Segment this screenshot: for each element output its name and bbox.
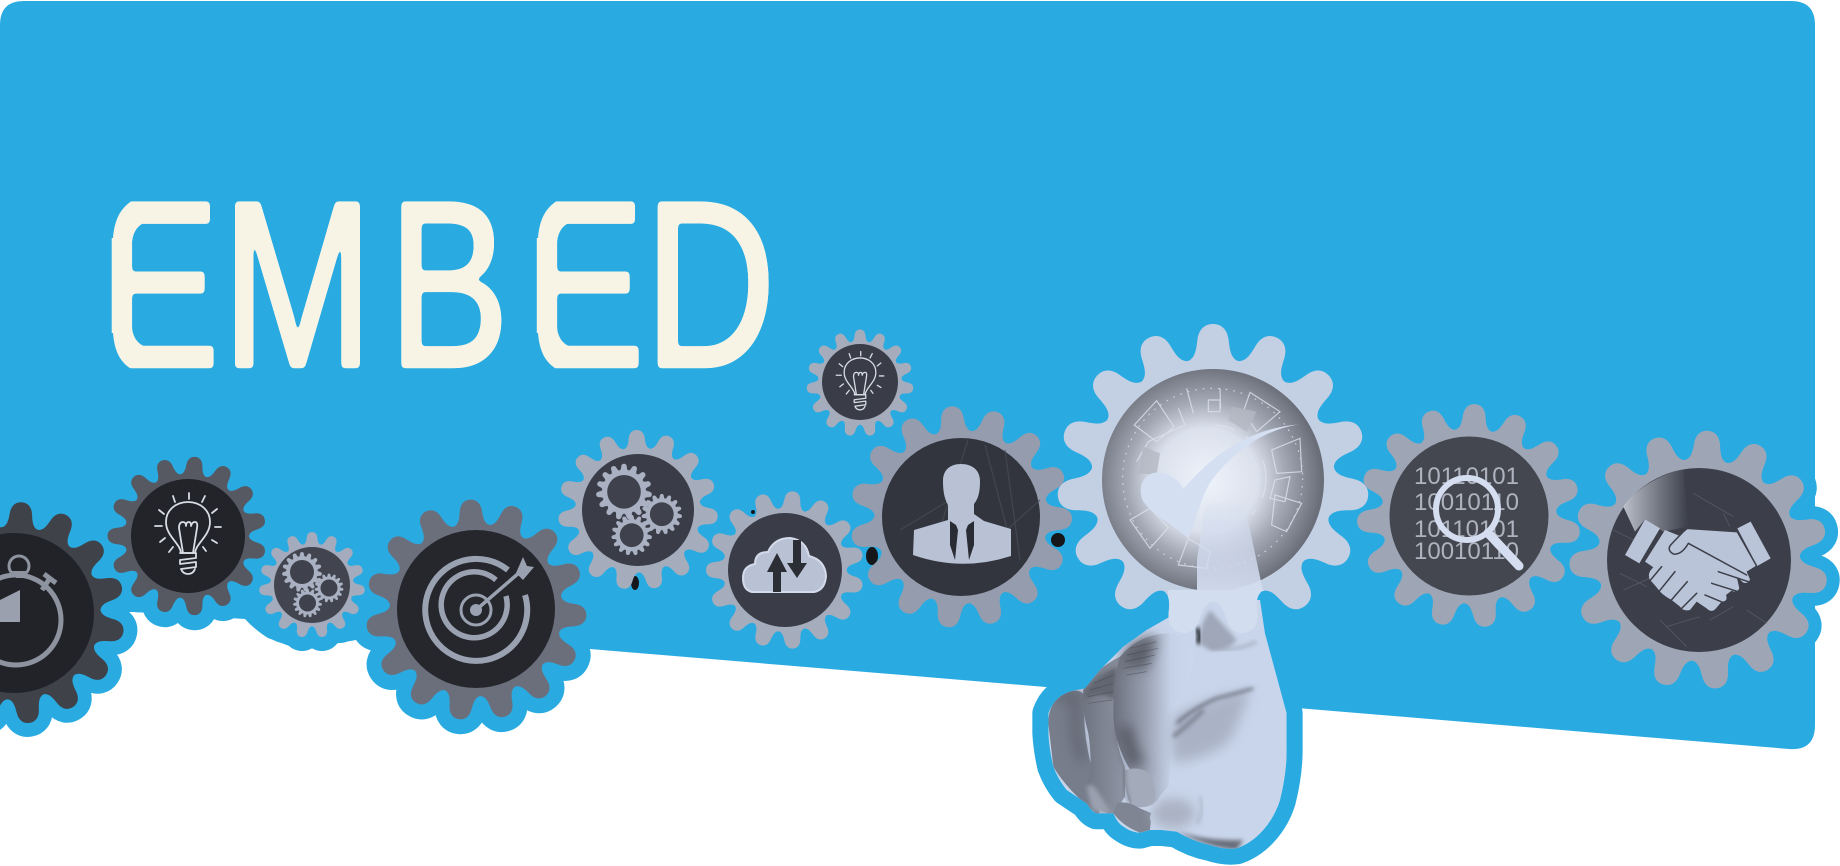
gear: small light bulb xyxy=(806,330,914,437)
icon: magnifying glass xyxy=(1436,478,1519,566)
gear: cloud transfer xyxy=(697,483,873,658)
icon: stopwatch xyxy=(0,556,61,665)
icon: cogs xyxy=(596,464,682,556)
gear: stopwatch xyxy=(0,494,134,733)
circuit pattern xyxy=(1123,388,1303,568)
icon: light bulb xyxy=(155,493,221,574)
icon: light bulb xyxy=(836,351,884,410)
hand: blue outline xyxy=(1048,617,1287,849)
gear: small cogs xyxy=(258,532,366,639)
icon: handshake xyxy=(1613,468,1771,647)
gear: cogs large xyxy=(556,429,720,592)
decorative dark specks behind gears xyxy=(6,503,1688,723)
text: binary digits: 10110101 xyxy=(1414,463,1519,490)
icon: cogs xyxy=(282,552,344,618)
pointing finger: translucent fingertip xyxy=(1168,521,1264,633)
hand: photo shading xyxy=(1048,600,1287,849)
gear: check mark (central) xyxy=(1055,324,1371,638)
text: binary digits: 10010110 xyxy=(1414,538,1519,565)
gear outlines: blue halos xyxy=(0,422,1839,733)
title: EMBED xyxy=(99,152,776,416)
gear: light bulb xyxy=(99,449,275,624)
gear: business person xyxy=(839,397,1083,639)
check mark xyxy=(1141,424,1300,538)
icon: cloud with arrows xyxy=(743,538,826,592)
icon: target and arrow xyxy=(425,557,534,661)
gear: handshake xyxy=(1559,422,1839,700)
title letter corner softening xyxy=(106,194,575,375)
text: binary digits: 10110101 xyxy=(1414,516,1519,543)
hand pointing xyxy=(1030,600,1310,866)
gear: target xyxy=(359,494,594,728)
icon: person in suit xyxy=(913,464,1011,564)
gear: magnifier over binary xyxy=(1350,398,1588,635)
text: binary digits: 10010110 xyxy=(1414,489,1519,516)
